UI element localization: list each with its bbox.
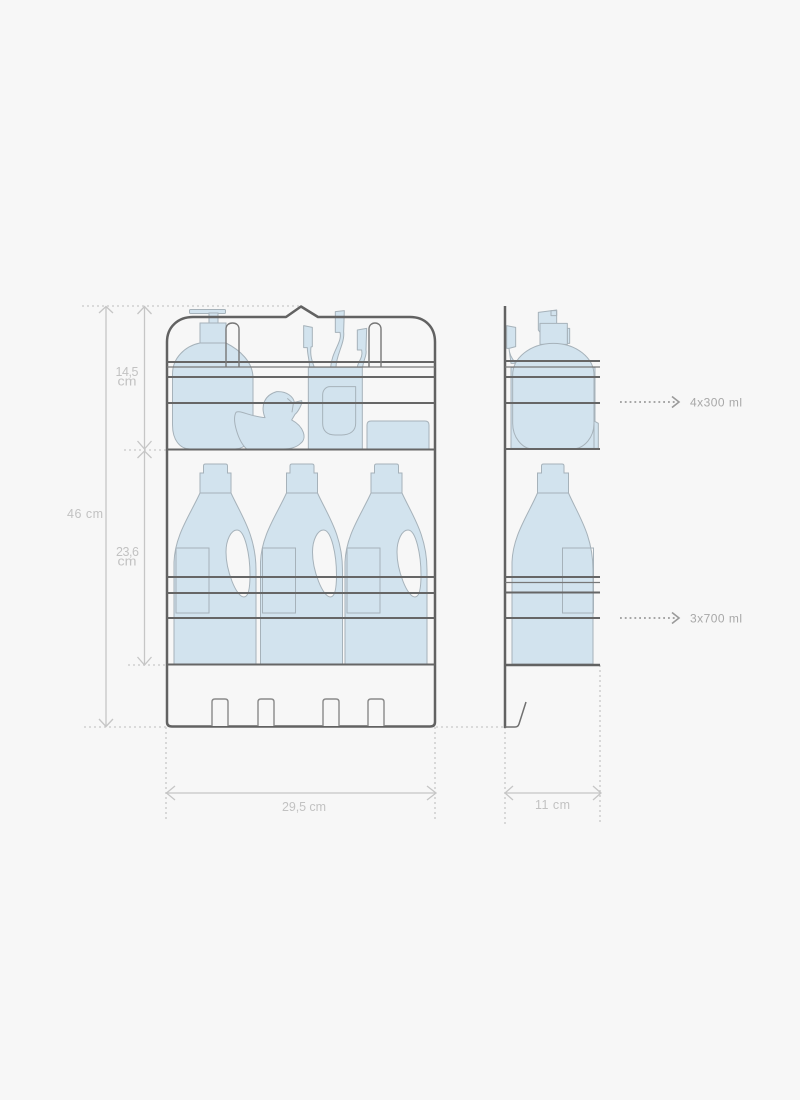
callout: 3x700 ml: 3x700 ml xyxy=(690,612,742,626)
dimension: upper section 14,5 cm: cm xyxy=(118,374,136,388)
dimension: lower section 23,6 cm xyxy=(116,451,152,665)
front view: wire shelf frame xyxy=(167,306,435,726)
dimension: upper section 14,5 cm xyxy=(116,306,152,449)
lower hooks xyxy=(212,699,384,726)
callout: 3x700 ml xyxy=(620,612,742,626)
side hook xyxy=(505,702,526,727)
upper wire loops xyxy=(226,323,381,367)
spine xyxy=(504,306,506,728)
rubber duck xyxy=(235,392,304,449)
detergent bottle 2 xyxy=(260,464,342,664)
toothbrushes xyxy=(304,311,367,367)
dimension: total height 46 cm xyxy=(67,306,113,726)
callout: 4x300 ml: 4x300 ml xyxy=(690,396,742,410)
front view: stored products xyxy=(172,310,429,664)
side view: wire shelf profile xyxy=(505,306,600,728)
side view: stored products xyxy=(507,310,598,449)
dimension: lower section 23,6 cm: cm xyxy=(118,554,136,568)
detergent bottle 3 xyxy=(345,464,427,664)
shelf rails xyxy=(167,362,435,664)
frame outline xyxy=(167,306,435,726)
toothbrush cup xyxy=(308,367,362,449)
side soap bottle xyxy=(513,323,594,449)
soap pump bottle xyxy=(172,310,253,449)
dimension: depth 11 cm xyxy=(505,786,601,812)
detergent bottle 1 xyxy=(174,464,256,664)
soap bar xyxy=(367,421,429,449)
callout: 4x300 ml xyxy=(620,396,742,410)
dimension: width 29,5 cm: 29,5 cm xyxy=(282,800,326,814)
dimension: depth 11 cm: 11 cm xyxy=(535,798,570,812)
dimension: width 29,5 cm xyxy=(166,786,436,814)
dimension: total height 46 cm: 46 cm xyxy=(67,507,103,521)
dimension: lower section 23,6 cm: 23,6 xyxy=(116,545,139,559)
side rails xyxy=(505,361,600,665)
side toothbrush and cup xyxy=(507,310,598,448)
side detergent bottle xyxy=(512,464,594,664)
dimension: upper section 14,5 cm: 14,5 xyxy=(116,365,139,379)
dimension guide lines xyxy=(82,306,600,825)
